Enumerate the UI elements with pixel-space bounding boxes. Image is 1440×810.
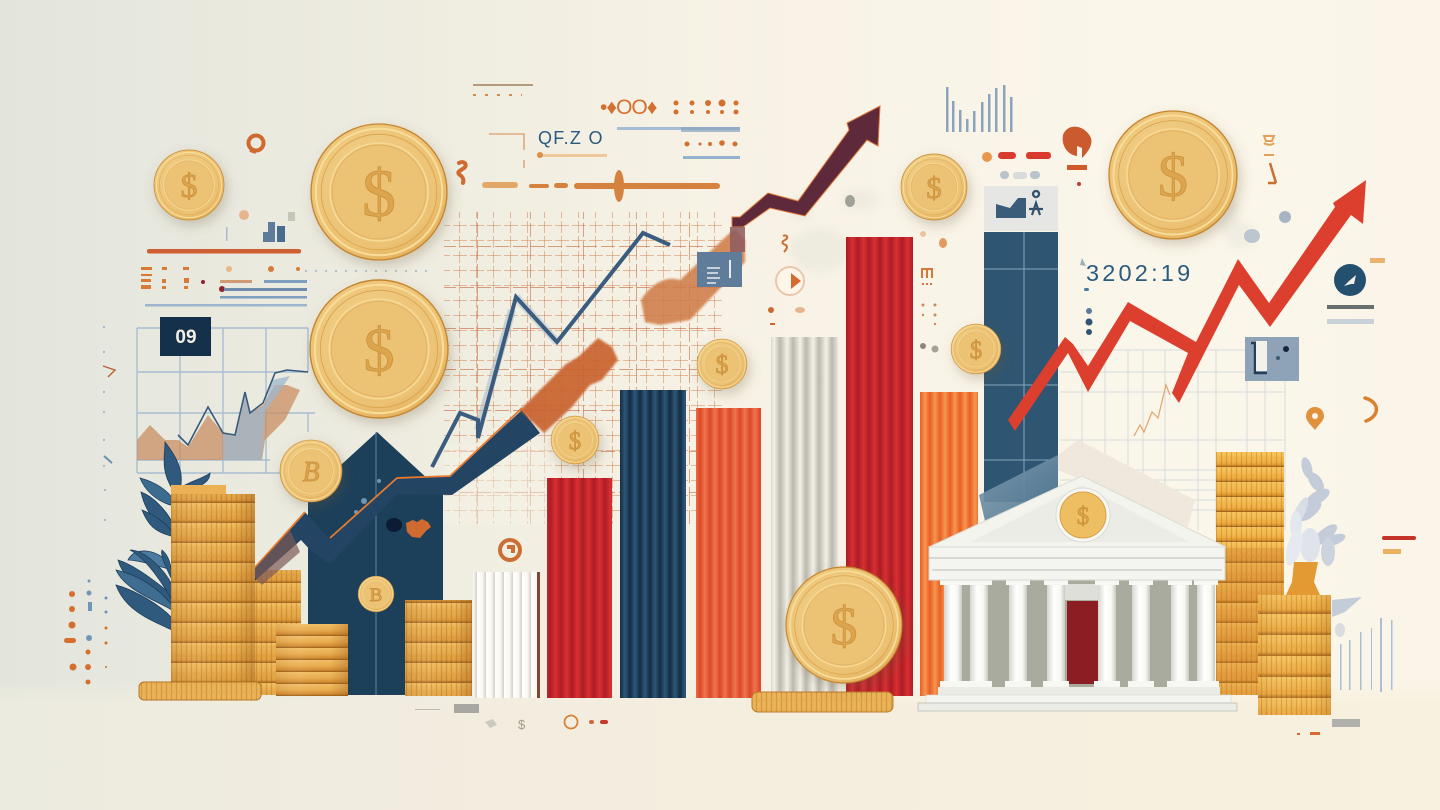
thin vertical lines right bbox=[1340, 618, 1392, 692]
arrow orange section bbox=[520, 338, 618, 433]
small orange sparkline bbox=[1134, 385, 1170, 436]
left decorative legends bbox=[64, 210, 433, 684]
coin 1: $ bbox=[180, 168, 198, 205]
coin 9: $ bbox=[1158, 143, 1188, 209]
coin 4: B bbox=[302, 457, 320, 488]
slate zigzag line bbox=[432, 233, 670, 467]
red dashes and blob bbox=[982, 127, 1091, 186]
gold stack F bbox=[1258, 562, 1331, 715]
maroon arrow bbox=[732, 106, 880, 227]
white bar bbox=[473, 572, 540, 698]
coin 7: $ bbox=[926, 170, 942, 205]
glass sheet behind bank bbox=[979, 455, 1058, 521]
tall red bar bbox=[846, 237, 913, 696]
play icon bbox=[776, 267, 804, 295]
navy orange rising arrow bbox=[248, 338, 618, 587]
line chart panel: left bbox=[137, 317, 315, 473]
coin 7 bbox=[901, 154, 967, 220]
coin 8: $ bbox=[970, 337, 982, 364]
colonnade back wall bbox=[945, 580, 1215, 687]
coin 3: $ bbox=[364, 317, 394, 385]
red rising arrow bbox=[1008, 180, 1366, 431]
base steps bbox=[918, 687, 1237, 711]
chart area bbox=[137, 385, 300, 460]
light grid right bbox=[1060, 350, 1285, 530]
coin 4 bbox=[280, 440, 342, 502]
house shape bbox=[308, 432, 443, 695]
icon: orange ring bottom centre bbox=[500, 540, 520, 560]
plant right bbox=[1283, 456, 1362, 637]
columns bbox=[944, 583, 1215, 683]
bank building bbox=[918, 476, 1237, 711]
coin 11 bbox=[358, 576, 394, 612]
gold stack E bbox=[1216, 452, 1284, 695]
stack A base coin bbox=[139, 682, 261, 700]
gold stack C bbox=[276, 624, 348, 696]
paper sheet behind bank bbox=[1058, 440, 1195, 527]
background bbox=[0, 0, 366, 810]
orange smear arrow band bbox=[641, 228, 745, 325]
date label: 3202:19 bbox=[1086, 260, 1193, 286]
right side legend lines bbox=[1327, 258, 1385, 324]
gold stack A bbox=[139, 485, 261, 700]
left edge dots bbox=[103, 326, 106, 521]
door bbox=[1065, 584, 1100, 684]
navy bar bbox=[620, 390, 686, 698]
right icon marks bbox=[1080, 136, 1291, 335]
label box 09 bbox=[160, 317, 211, 356]
tall navy bar with panel bbox=[984, 186, 1058, 502]
chart line bbox=[178, 370, 308, 445]
coin on bank bbox=[1056, 488, 1110, 542]
top-right mini bar chart bbox=[946, 85, 1012, 132]
right dashes bbox=[1382, 536, 1416, 554]
floor marks: $ bbox=[518, 717, 526, 732]
brush stroke line bbox=[482, 170, 720, 202]
coin 1 bbox=[154, 150, 224, 220]
small dots bbox=[344, 479, 381, 528]
leaves left bbox=[116, 442, 210, 630]
coin 6: $ bbox=[716, 350, 728, 379]
orange grid centre bbox=[444, 212, 724, 525]
coin 10 bbox=[786, 567, 902, 683]
orange-red bar bbox=[696, 408, 761, 698]
red bar 1 bbox=[547, 478, 612, 698]
gold stack B behind bbox=[250, 570, 301, 695]
gold stack D bbox=[405, 600, 472, 696]
chart area blue bbox=[223, 376, 290, 460]
pediment bbox=[929, 476, 1226, 547]
coin 5 bbox=[551, 416, 599, 464]
coin 6 bbox=[697, 339, 747, 389]
grey bar bbox=[771, 337, 838, 692]
orange header glyph row: •♦OO♦ bbox=[600, 96, 658, 119]
bottom-left dots bbox=[64, 591, 108, 684]
coin 2 bbox=[311, 124, 447, 260]
entablature bbox=[929, 547, 1225, 580]
coin 3 bbox=[310, 280, 448, 418]
icon: location pin bbox=[1306, 407, 1324, 430]
text header: top centre bbox=[458, 84, 740, 202]
icon: orange arc bbox=[1365, 398, 1376, 421]
bar chart bbox=[473, 186, 1058, 698]
coin 5: $ bbox=[569, 428, 581, 455]
floor marks bbox=[415, 704, 1360, 735]
icon: red blob bbox=[1063, 127, 1091, 158]
label QF.Z O: QF.Z O bbox=[538, 128, 604, 148]
chart grid bbox=[137, 328, 315, 473]
icon: orange squiggle bbox=[458, 162, 466, 183]
coin 9 bbox=[1109, 111, 1237, 239]
icon: orange ring top-left bbox=[248, 136, 264, 152]
house emblem bbox=[386, 518, 431, 538]
coin on bank: $ bbox=[1077, 503, 1089, 530]
panel icon on bar bbox=[984, 186, 1058, 231]
label box 09: 09 bbox=[175, 327, 197, 348]
mini bars bbox=[226, 212, 295, 242]
coin 10: $ bbox=[830, 596, 858, 656]
slate note box bbox=[1245, 337, 1299, 381]
coin 8 bbox=[951, 324, 1001, 374]
coin 2: $ bbox=[362, 155, 396, 231]
navy circle icon bbox=[1334, 264, 1366, 296]
coin 11: B bbox=[370, 585, 382, 606]
small chart box bbox=[697, 227, 745, 287]
orange bar bbox=[920, 392, 978, 696]
base coin under bar bbox=[752, 692, 893, 712]
small centre marks bbox=[768, 195, 947, 352]
